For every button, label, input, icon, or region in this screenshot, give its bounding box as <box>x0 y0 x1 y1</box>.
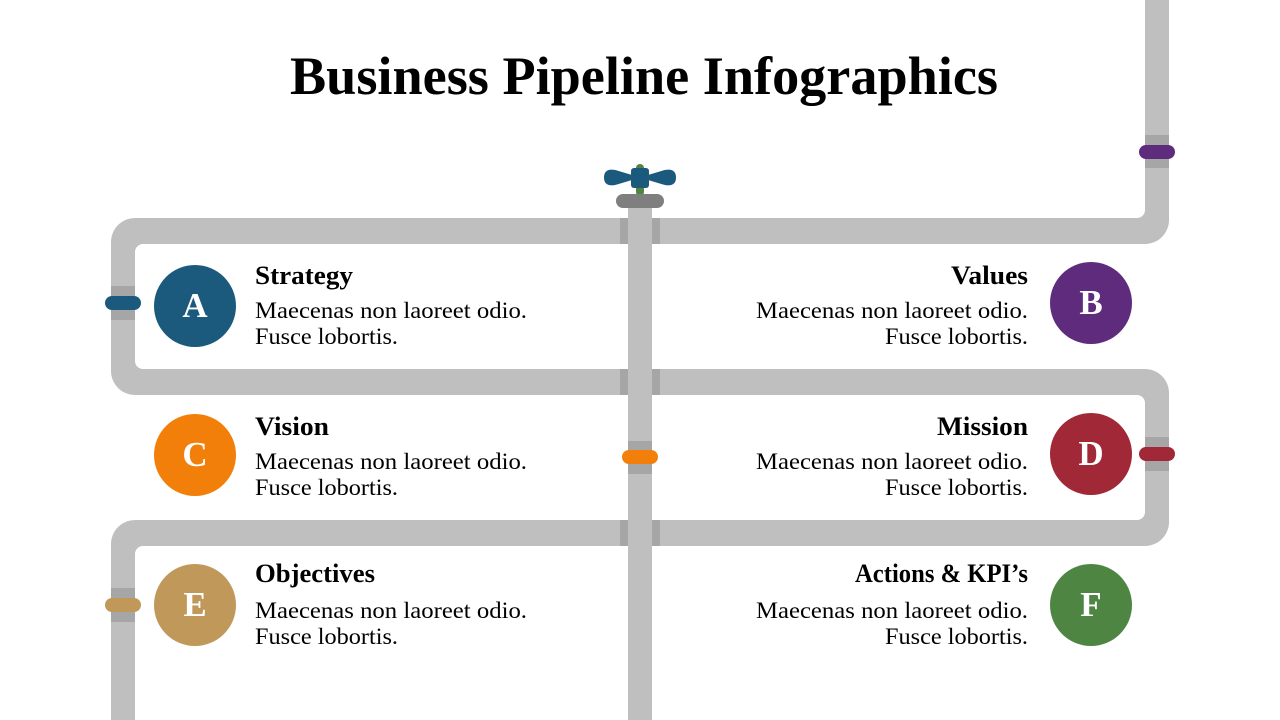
item E: Objectives: E <box>183 585 207 624</box>
item A: Strategy: Strategy <box>255 261 353 290</box>
item D: Mission: D <box>1078 434 1104 473</box>
coupling: orange clamp <box>622 441 658 474</box>
title: Business Pipeline Infographics <box>290 46 998 106</box>
item C: Vision: C <box>182 435 208 474</box>
item F: Actions & KPI's: Fusce lobortis. <box>885 624 1028 650</box>
item D: Mission: Mission <box>937 412 1029 441</box>
item F: Actions & KPI's: F <box>1080 585 1102 624</box>
coupling: red clamp <box>1139 437 1175 471</box>
item B: Values: Values <box>951 261 1028 290</box>
item A: Strategy: Fusce lobortis. <box>255 324 398 350</box>
item D: Mission: Maecenas non laoreet odio. <box>756 449 1028 475</box>
item B: Values: Maecenas non laoreet odio. <box>756 298 1028 324</box>
central pipe <box>628 205 652 720</box>
item E: Objectives <box>154 559 527 650</box>
coupling: tan clamp <box>105 588 141 622</box>
coupling: blue clamp <box>105 286 141 320</box>
item C: Vision: Maecenas non laoreet odio. <box>255 449 527 475</box>
item B: Values <box>756 261 1132 350</box>
item E: Objectives: Maecenas non laoreet odio. <box>255 598 527 624</box>
item F: Actions & KPI's <box>756 559 1132 650</box>
item A: Strategy <box>154 261 527 350</box>
valve <box>604 164 676 208</box>
item B: Values: Fusce lobortis. <box>885 324 1028 350</box>
item C: Vision: Vision <box>255 412 330 441</box>
item B: Values: B <box>1079 283 1103 322</box>
coupling: purple clamp <box>1139 135 1175 168</box>
item F: Actions & KPI's: Maecenas non laoreet odio. <box>756 598 1028 624</box>
item C: Vision <box>154 412 527 501</box>
item D: Mission: Fusce lobortis. <box>885 475 1028 501</box>
item D: Mission <box>756 412 1132 501</box>
item C: Vision: Fusce lobortis. <box>255 475 398 501</box>
item E: Objectives: Fusce lobortis. <box>255 624 398 650</box>
item E: Objectives: Objectives <box>255 559 375 588</box>
item F: Actions & KPI's: Actions & KPI’s <box>855 559 1028 588</box>
item A: Strategy: Maecenas non laoreet odio. <box>255 298 527 324</box>
item A: Strategy: A <box>182 286 208 325</box>
